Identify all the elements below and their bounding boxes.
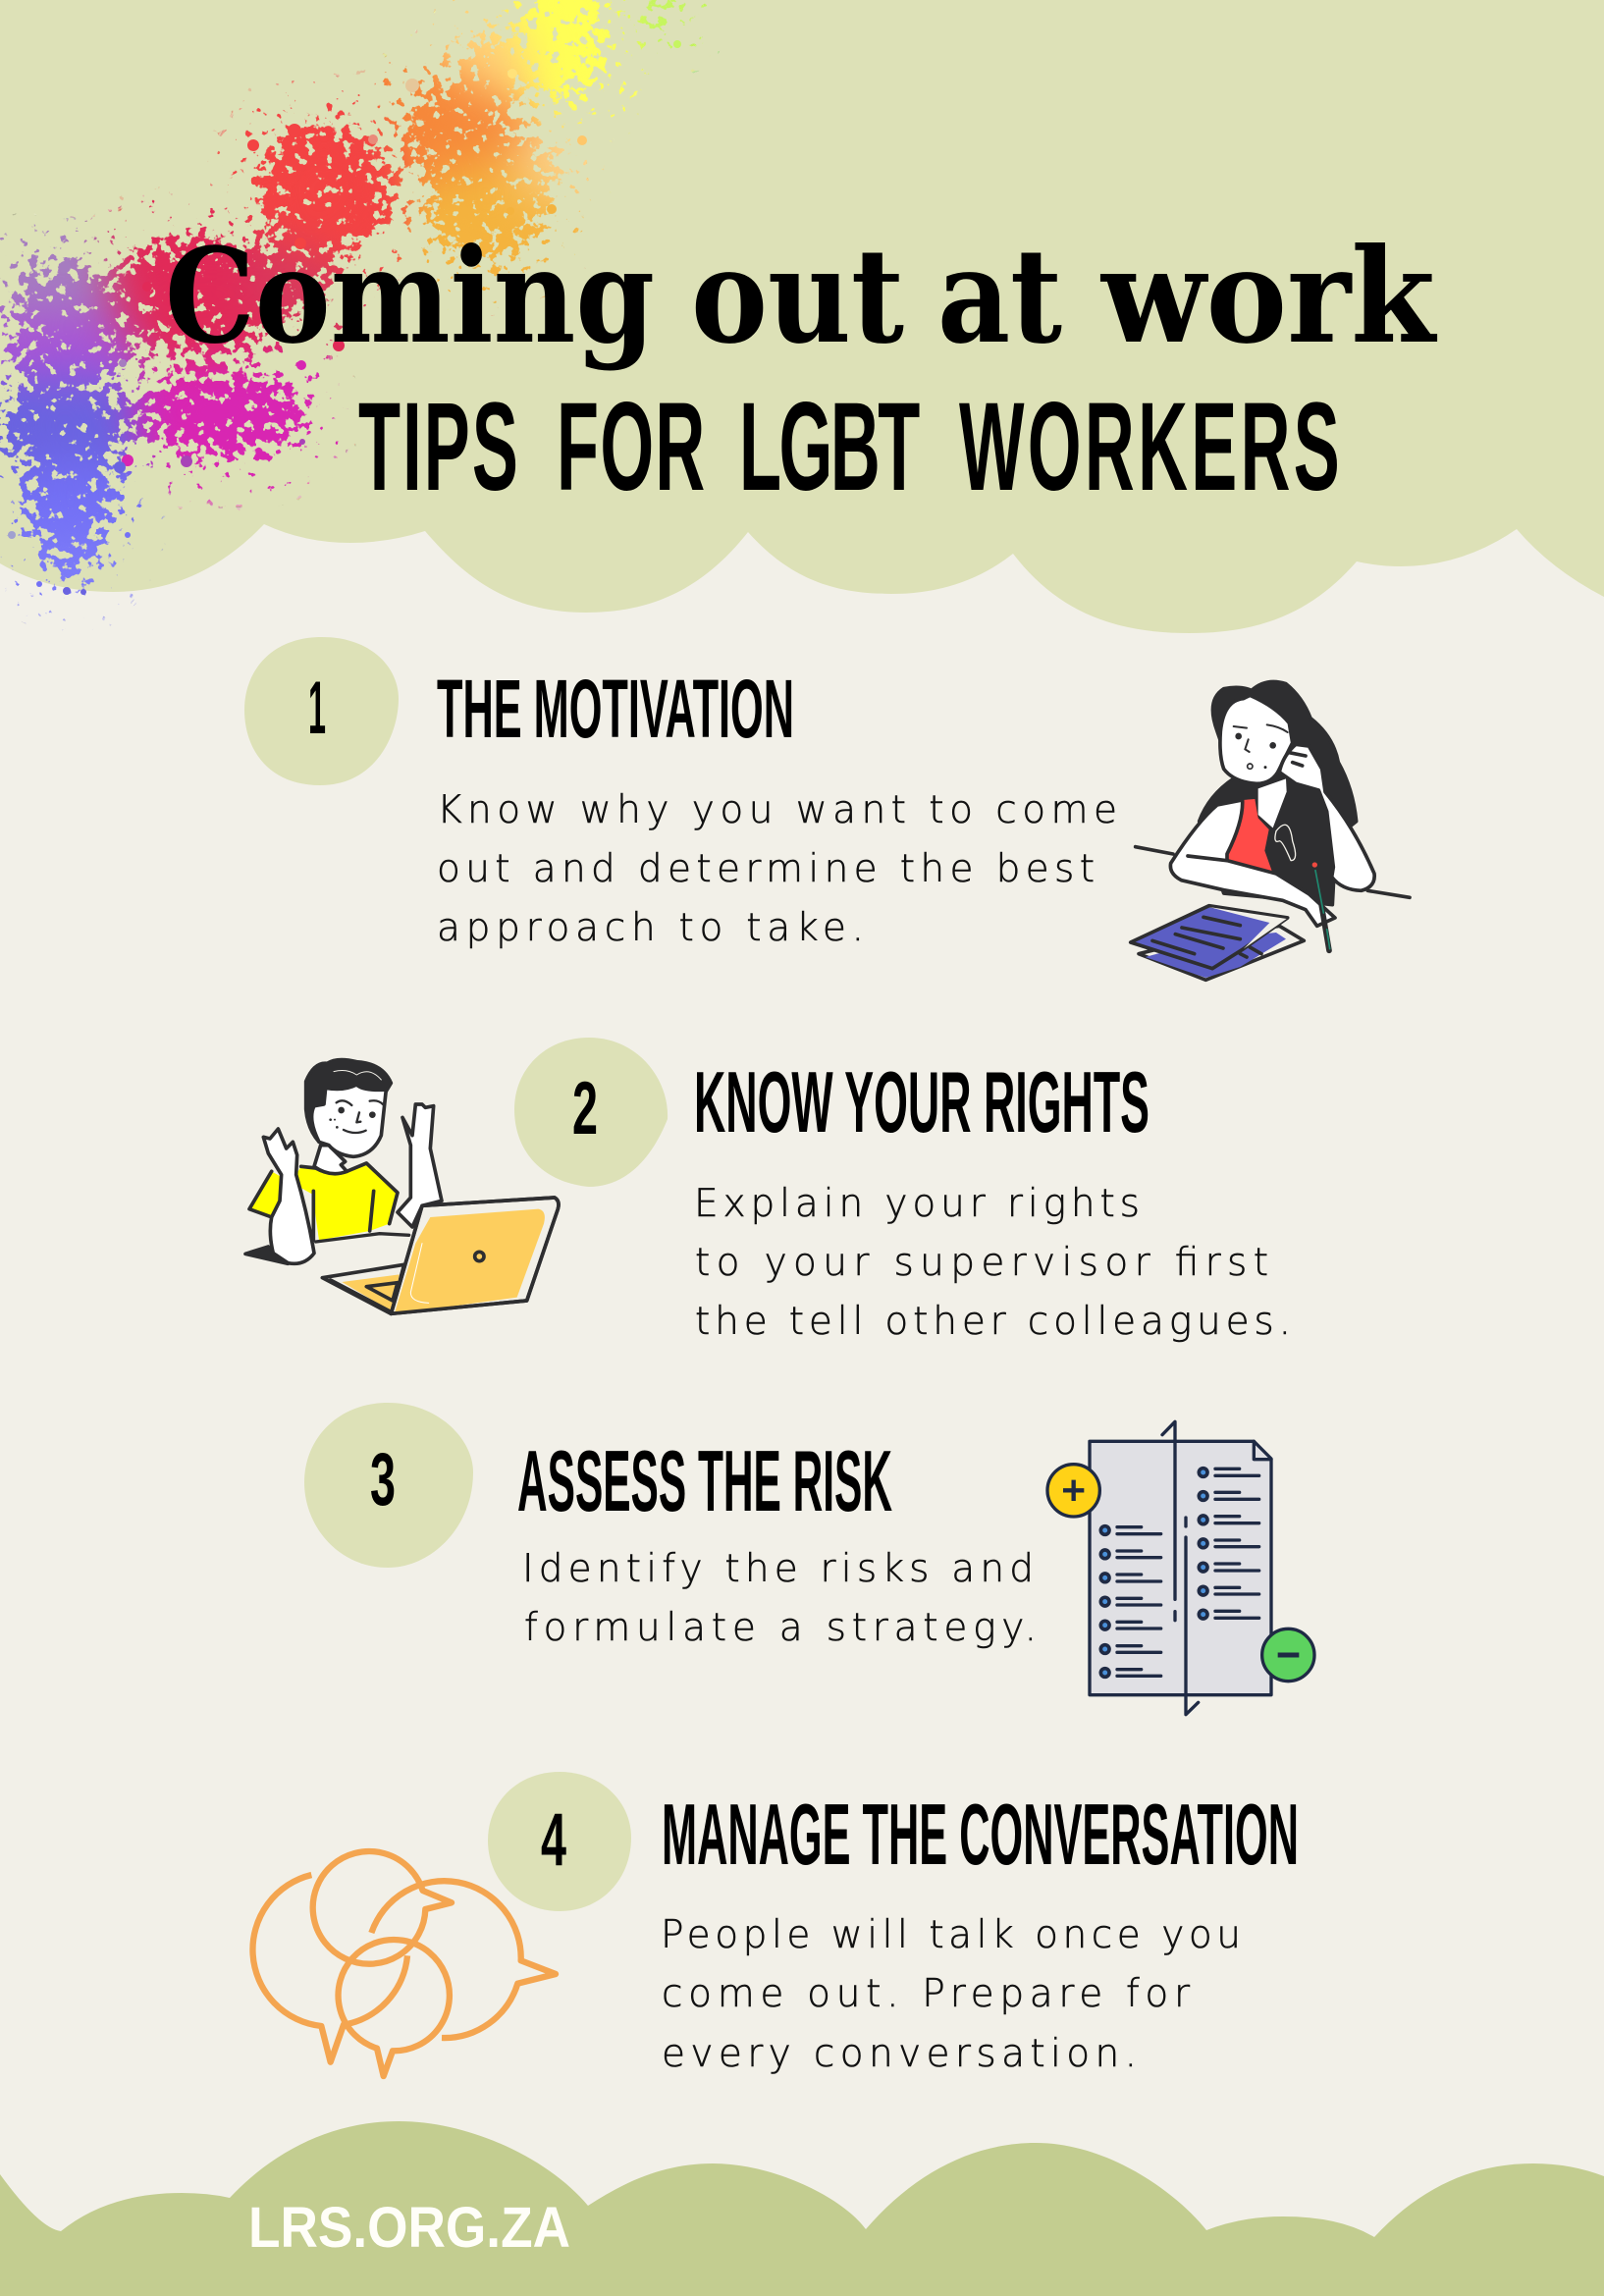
body text 3: formulate a strategy.	[524, 1606, 1037, 1650]
number blob 2	[514, 1038, 668, 1187]
number blob 1	[244, 637, 399, 785]
paint splatter	[0, 0, 681, 595]
title: Coming	[165, 220, 655, 373]
number blob 4	[488, 1772, 631, 1911]
number 3: 3	[370, 1438, 396, 1522]
icon: overlapping speech bubbles	[252, 1851, 556, 2076]
body text 4: every conversation.	[662, 2032, 1137, 2076]
body text 2: the tell other colleagues.	[695, 1300, 1291, 1344]
body text 3: Identify the risks and	[522, 1547, 1034, 1591]
body text 1	[437, 788, 1117, 950]
panel: step 1 the motivation	[244, 637, 1410, 980]
body text 4: People will talk once you	[661, 1913, 1241, 1957]
header cloud band	[0, 0, 1604, 633]
subtitle	[358, 376, 1340, 516]
body text 4	[661, 1913, 1241, 2076]
panel: step 2 know your rights	[245, 1038, 1291, 1344]
body text 1: approach to take.	[437, 906, 864, 950]
heading 2: KNOW YOUR RIGHTS	[694, 1053, 1150, 1150]
icon: pros and cons document	[1047, 1421, 1314, 1715]
number 4: 4	[541, 1798, 566, 1882]
footer cloud band	[0, 2121, 1604, 2296]
footer website text: LRS.ORG.ZA	[248, 2196, 570, 2260]
body text 1: Know why you want to come	[437, 788, 1117, 832]
title: work	[1099, 220, 1438, 373]
body text 3	[522, 1547, 1037, 1650]
body text 2: Explain your rights	[694, 1182, 1140, 1226]
illustration: boy waving at laptop	[245, 1060, 559, 1314]
droplets	[8, 40, 681, 595]
title: at	[937, 220, 1062, 373]
body text 2	[694, 1182, 1291, 1344]
panel: step 4 manage the conversation	[252, 1772, 1299, 2076]
panel: step 1 the motivation: 1	[308, 667, 326, 750]
number blob 3	[304, 1403, 473, 1568]
panel: step 3 assess the risk: ASSESS THE RISK	[517, 1432, 892, 1529]
subtitle: WORKERS	[959, 376, 1340, 516]
subtitle: LGBT	[739, 376, 920, 516]
body text 2: to your supervisor first	[695, 1241, 1268, 1285]
number 2: 2	[572, 1067, 598, 1150]
body text 1: out and determine the best	[437, 847, 1095, 891]
body text 4: come out. Prepare for	[662, 1972, 1190, 2016]
illustration: woman thinking at desk	[1131, 681, 1410, 980]
panel: step 3 assess the risk	[304, 1403, 1314, 1715]
subtitle: TIPS	[358, 376, 518, 516]
title: out	[691, 220, 904, 373]
title	[165, 220, 1438, 373]
heading 1: THE MOTIVATION	[437, 663, 794, 755]
subtitle: FOR	[557, 376, 705, 516]
